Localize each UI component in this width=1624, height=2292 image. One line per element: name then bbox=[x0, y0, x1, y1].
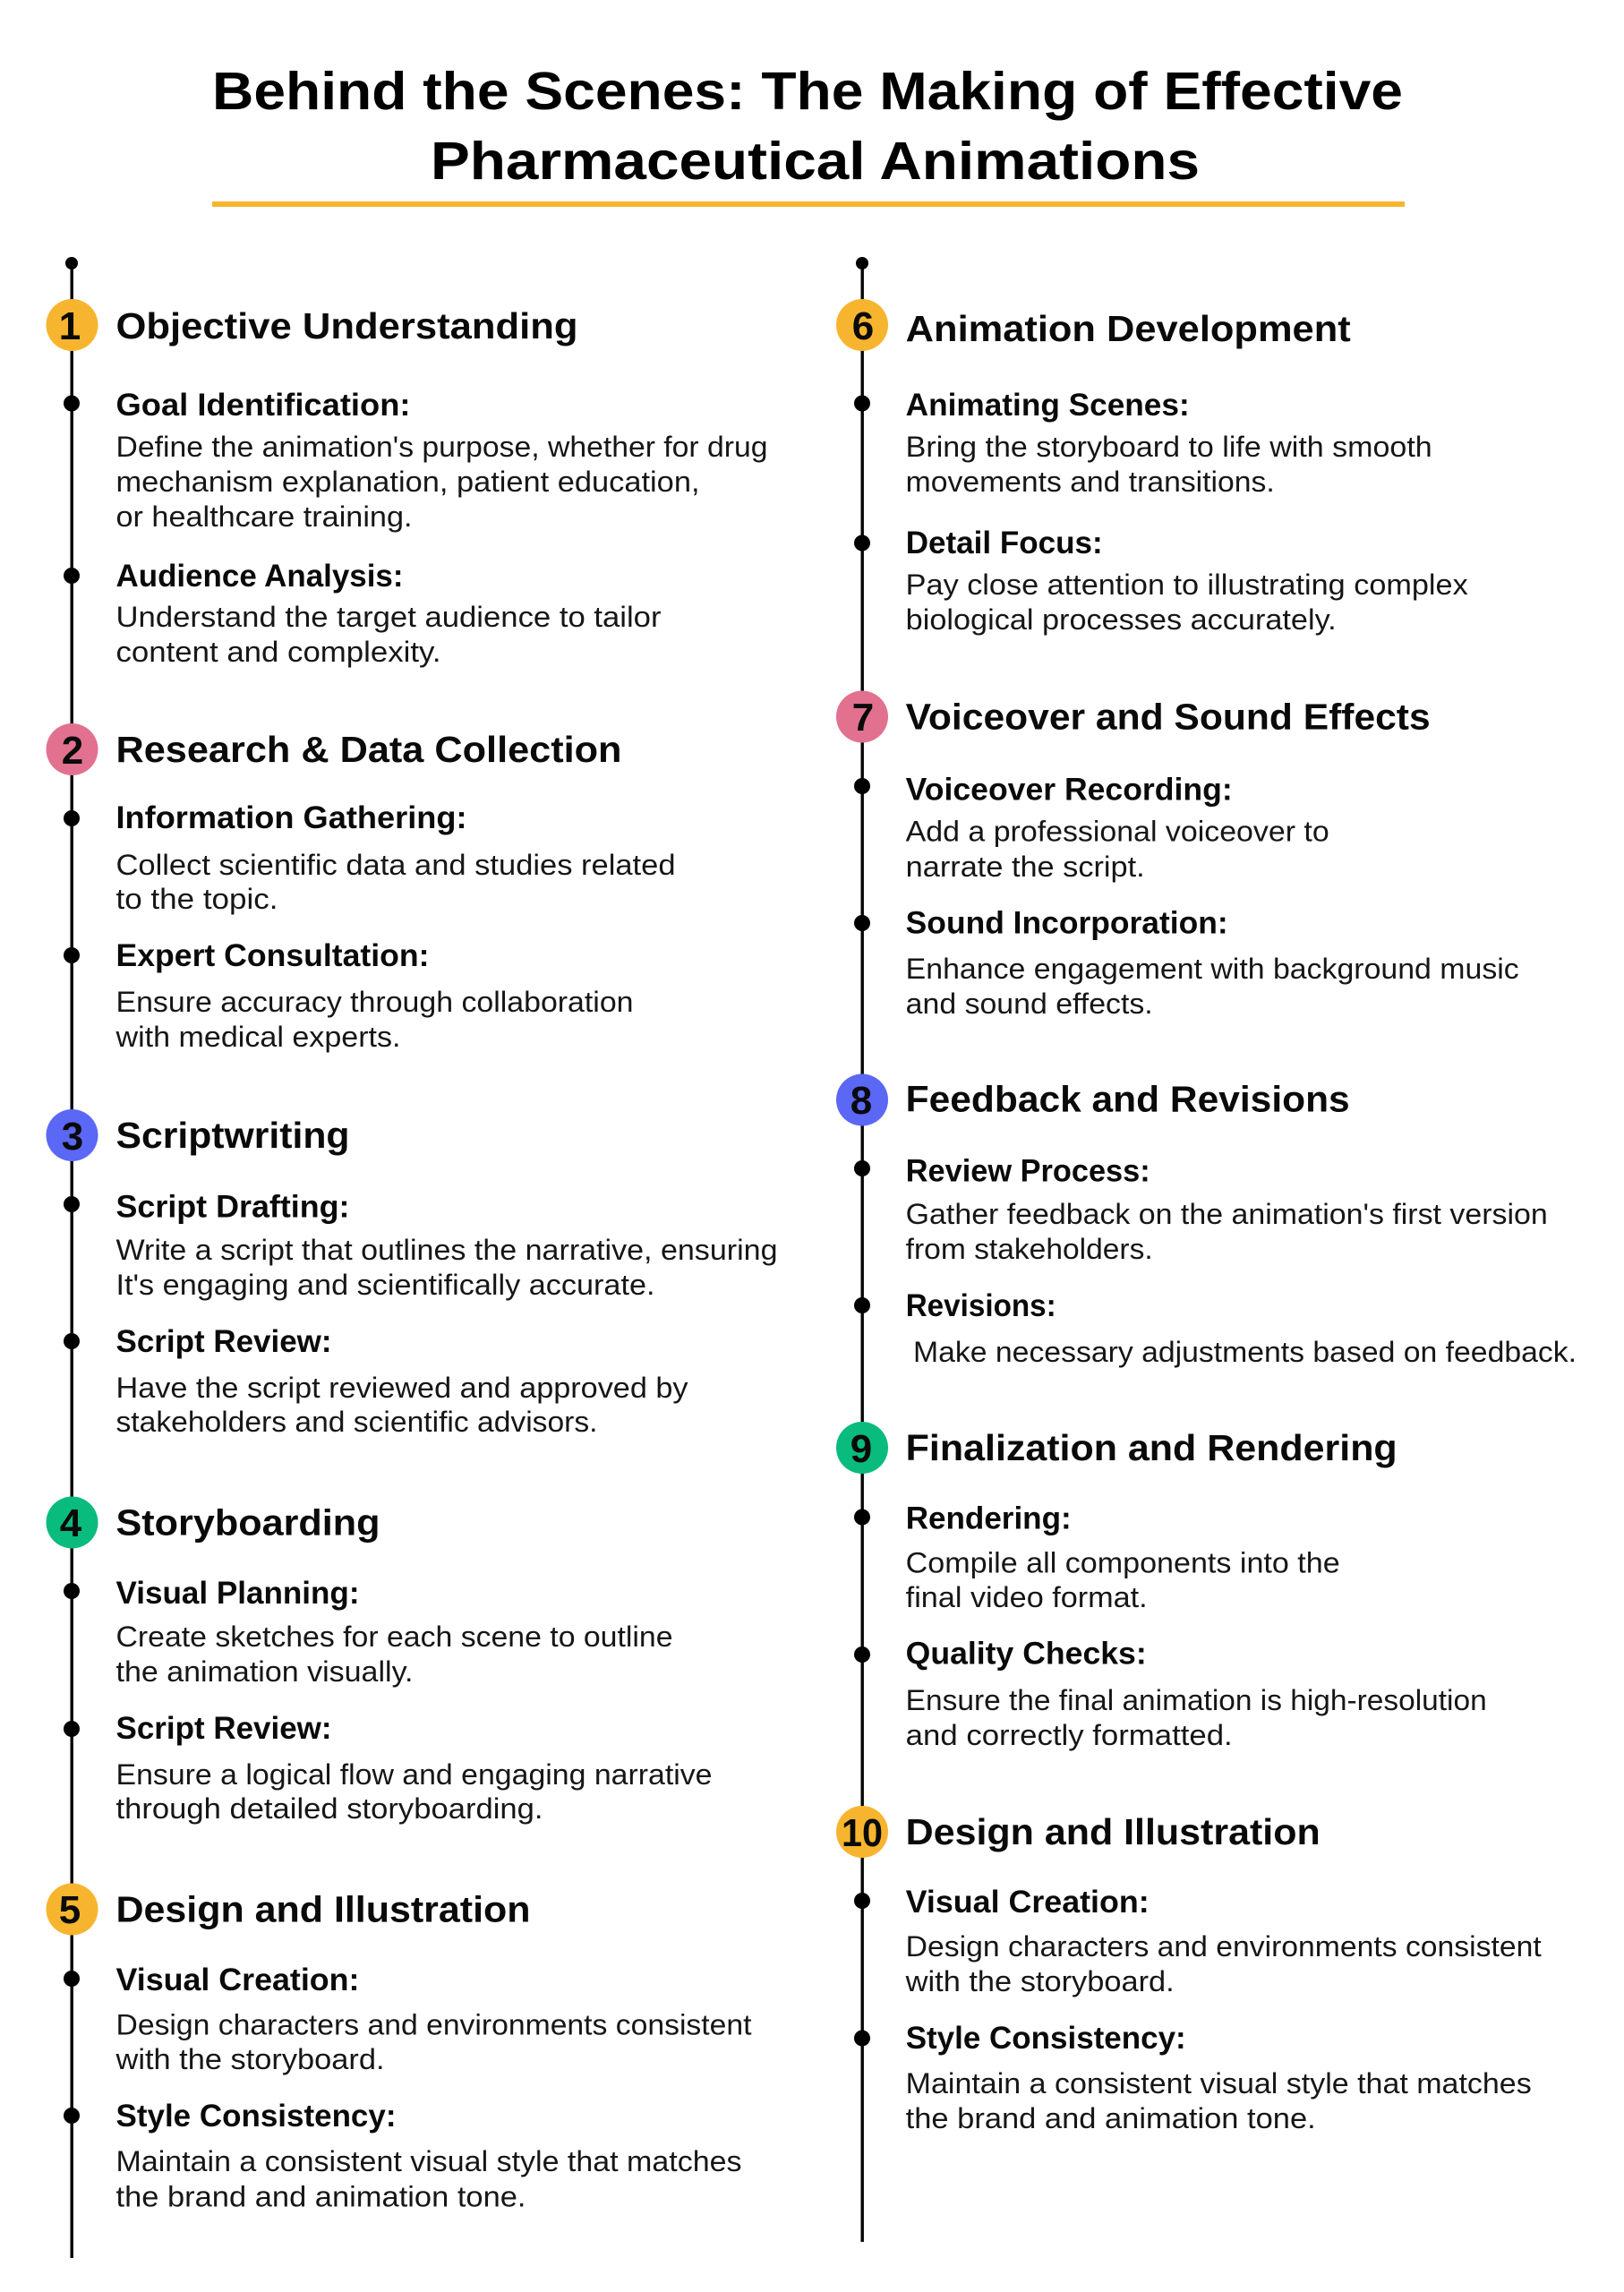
panel: step 3 bbox=[47, 1109, 777, 1438]
item: Animating Scenes: movements and transitions. bbox=[906, 466, 1275, 498]
panel: step 10 bbox=[836, 1806, 1542, 2134]
item: Review Process: Review Process: bbox=[906, 1153, 1150, 1189]
panel: step 1 bbox=[47, 299, 767, 668]
heading: Scriptwriting: Scriptwriting bbox=[116, 1115, 349, 1156]
item: Sound Incorporation bbox=[854, 906, 1519, 1020]
item: Rendering bbox=[854, 1501, 1340, 1613]
item: Script Drafting bbox=[64, 1189, 777, 1301]
item: Goal Identification bbox=[64, 388, 767, 533]
item: Quality Checks bbox=[854, 1637, 1487, 1751]
left timeline line bbox=[65, 257, 78, 2258]
badge 6: 6 bbox=[852, 304, 874, 348]
item: Visual Creation bbox=[64, 1963, 752, 2075]
item: Style Consistency: Style Consistency: bbox=[906, 2021, 1186, 2056]
item: Detail Focus bbox=[854, 526, 1468, 636]
item: Detail Focus: biological processes accurately. bbox=[906, 603, 1337, 636]
panel: step 7 bbox=[836, 691, 1519, 1020]
item: Goal Identification: or healthcare training. bbox=[116, 500, 413, 533]
badge 5 bbox=[47, 1884, 98, 1936]
panel: step 9 bbox=[836, 1422, 1487, 1751]
item: Goal Identification: mechanism explanation, patient education, bbox=[116, 466, 700, 498]
item: Audience Analysis: Understand the target audience to tailor bbox=[116, 601, 662, 633]
item: Expert Consultation: Expert Consultation: bbox=[116, 938, 429, 973]
item: Goal Identification: Define the animation's purpose, whether for drug bbox=[116, 431, 767, 463]
item: Quality Checks: and correctly formatted. bbox=[906, 1719, 1233, 1751]
item: Rendering: Compile all components into the bbox=[906, 1547, 1340, 1579]
item: Visual Creation: Visual Creation: bbox=[906, 1885, 1150, 1920]
item: Detail Focus: Detail Focus: bbox=[906, 526, 1103, 560]
item: Animating Scenes: Animating Scenes: bbox=[906, 388, 1190, 423]
badge 7 bbox=[836, 691, 888, 743]
item: Review Process: from stakeholders. bbox=[906, 1233, 1153, 1265]
item: Information Gathering: Collect scientific data and studies related bbox=[116, 849, 675, 881]
badge 9 bbox=[836, 1422, 888, 1474]
heading: Design and Illustration: Design and Illustration bbox=[116, 1889, 530, 1930]
item: Style Consistency: Maintain a consistent visual style that matches bbox=[906, 2067, 1532, 2100]
item: Visual Creation: Visual Creation: bbox=[116, 1963, 360, 1997]
badge 4: 4 bbox=[60, 1501, 82, 1545]
item: Sound Incorporation: Enhance engagement with background music bbox=[906, 953, 1519, 985]
heading: Design and Illustration: Design and Illustration bbox=[906, 1811, 1321, 1852]
badge 6 bbox=[836, 299, 888, 351]
item: Visual Creation: Design characters and environments consistent bbox=[116, 2009, 752, 2041]
item: Detail Focus: Pay close attention to illustrating complex bbox=[906, 569, 1468, 601]
item: Review Process bbox=[854, 1153, 1548, 1265]
item: Review Process: Gather feedback on the animation's first version bbox=[906, 1198, 1548, 1230]
item: Voiceover Recording bbox=[854, 772, 1329, 883]
badge 3: 3 bbox=[62, 1115, 83, 1159]
item: Audience Analysis bbox=[64, 559, 662, 668]
item: Visual Creation: with the storyboard. bbox=[115, 2043, 385, 2075]
item: Visual Creation: Design characters and environments consistent bbox=[906, 1930, 1542, 1963]
heading: Feedback and Revisions: Feedback and Revisions bbox=[906, 1078, 1350, 1119]
badge 2: 2 bbox=[62, 729, 83, 773]
badge 1 bbox=[47, 299, 98, 351]
item: Script Drafting: It's engaging and scientifically accurate. bbox=[116, 1269, 655, 1301]
item: Revisions bbox=[854, 1288, 1577, 1368]
item: Visual Planning: the animation visually. bbox=[116, 1655, 414, 1688]
item: Script Review bbox=[64, 1324, 688, 1438]
item: Expert Consultation bbox=[64, 938, 634, 1053]
title: Behind the Scenes: The Making of Effective bbox=[212, 62, 1403, 121]
badge 4 bbox=[47, 1497, 98, 1549]
heading: Animation Development: Animation Development bbox=[906, 308, 1351, 349]
item: Script Review: Script Review: bbox=[116, 1324, 331, 1359]
badge 8: 8 bbox=[850, 1079, 872, 1123]
title bbox=[212, 62, 1403, 191]
item: Visual Creation bbox=[854, 1885, 1542, 1997]
item: Animating Scenes bbox=[854, 388, 1432, 498]
item: Script Review: through detailed storyboarding. bbox=[116, 1792, 543, 1825]
badge 9: 9 bbox=[850, 1427, 872, 1471]
heading: Storyboarding: Storyboarding bbox=[116, 1502, 380, 1544]
item: Style Consistency bbox=[64, 2099, 741, 2213]
panel: step 6 bbox=[836, 299, 1468, 636]
item: Style Consistency: the brand and animation tone. bbox=[906, 2102, 1316, 2134]
item: Audience Analysis: content and complexity. bbox=[116, 636, 440, 668]
badge 5: 5 bbox=[59, 1888, 81, 1932]
badge 7: 7 bbox=[852, 696, 874, 740]
item: Information Gathering: to the topic. bbox=[116, 883, 278, 915]
item: Visual Creation: with the storyboard. bbox=[905, 1965, 1175, 1997]
item: Script Drafting: Script Drafting: bbox=[116, 1189, 349, 1225]
item: Script Review: stakeholders and scientific advisors. bbox=[116, 1406, 598, 1438]
item: Sound Incorporation: Sound Incorporation: bbox=[906, 906, 1228, 940]
item: Script Review: Ensure a logical flow and engaging narrative bbox=[116, 1758, 713, 1791]
item: Visual Planning bbox=[64, 1576, 673, 1688]
panel: step 5 bbox=[47, 1884, 752, 2213]
heading: Finalization and Rendering: Finalization and Rendering bbox=[906, 1427, 1397, 1468]
heading: Voiceover and Sound Effects: Voiceover and Sound Effects bbox=[906, 697, 1431, 738]
item: Goal Identification: Goal Identification: bbox=[116, 388, 410, 423]
item: Quality Checks: Ensure the final animation is high-resolution bbox=[906, 1684, 1487, 1716]
panel: step 2 bbox=[47, 723, 675, 1053]
item: Rendering: final video format. bbox=[906, 1581, 1148, 1613]
badge 1: 1 bbox=[59, 304, 81, 348]
item: Visual Planning: Visual Planning: bbox=[116, 1576, 360, 1611]
panel: step 8 bbox=[836, 1074, 1577, 1368]
item: Revisions: Revisions: bbox=[906, 1288, 1056, 1323]
badge 10: 10 bbox=[842, 1811, 883, 1855]
item: Audience Analysis: Audience Analysis: bbox=[116, 559, 403, 594]
panel: step 4 bbox=[47, 1497, 713, 1825]
item: Voiceover Recording: Voiceover Recording: bbox=[906, 772, 1233, 808]
item: Voiceover Recording: narrate the script. bbox=[906, 851, 1145, 883]
item: Expert Consultation: with medical experts. bbox=[115, 1021, 401, 1053]
item: Style Consistency bbox=[854, 2021, 1532, 2134]
heading: Objective Understanding: Objective Understanding bbox=[116, 305, 578, 346]
item: Style Consistency: Maintain a consistent visual style that matches bbox=[116, 2145, 741, 2177]
heading: Research & Data Collection: Research & Data Collection bbox=[116, 729, 621, 770]
item: Script Review bbox=[64, 1711, 713, 1825]
item: Revisions: Make necessary adjustments based on feedback. bbox=[913, 1336, 1577, 1368]
item: Script Review: Script Review: bbox=[116, 1711, 331, 1746]
title underline bbox=[212, 201, 1405, 207]
item: Style Consistency: Style Consistency: bbox=[116, 2099, 396, 2134]
item: Rendering: Rendering: bbox=[906, 1501, 1072, 1536]
badge 8 bbox=[836, 1074, 888, 1126]
item: Expert Consultation: Ensure accuracy through collaboration bbox=[116, 986, 634, 1018]
badge 2 bbox=[47, 723, 98, 775]
item: Information Gathering: Information Gathering: bbox=[116, 800, 467, 835]
item: Quality Checks: Quality Checks: bbox=[906, 1637, 1147, 1671]
item: Visual Planning: Create sketches for each scene to outline bbox=[116, 1621, 673, 1653]
item: Script Review: Have the script reviewed and approved by bbox=[116, 1372, 688, 1404]
right timeline line bbox=[856, 257, 868, 2242]
item: Script Drafting: Write a script that outlines the narrative, ensuring bbox=[116, 1234, 777, 1266]
item: Information Gathering bbox=[64, 800, 675, 915]
title: Pharmaceutical Animations bbox=[431, 132, 1200, 191]
badge 3 bbox=[47, 1109, 98, 1161]
item: Sound Incorporation: and sound effects. bbox=[906, 988, 1153, 1020]
item: Animating Scenes: Bring the storyboard to life with smooth bbox=[906, 431, 1432, 463]
item: Style Consistency: the brand and animation tone. bbox=[116, 2181, 526, 2213]
item: Voiceover Recording: Add a professional voiceover to bbox=[906, 815, 1329, 847]
